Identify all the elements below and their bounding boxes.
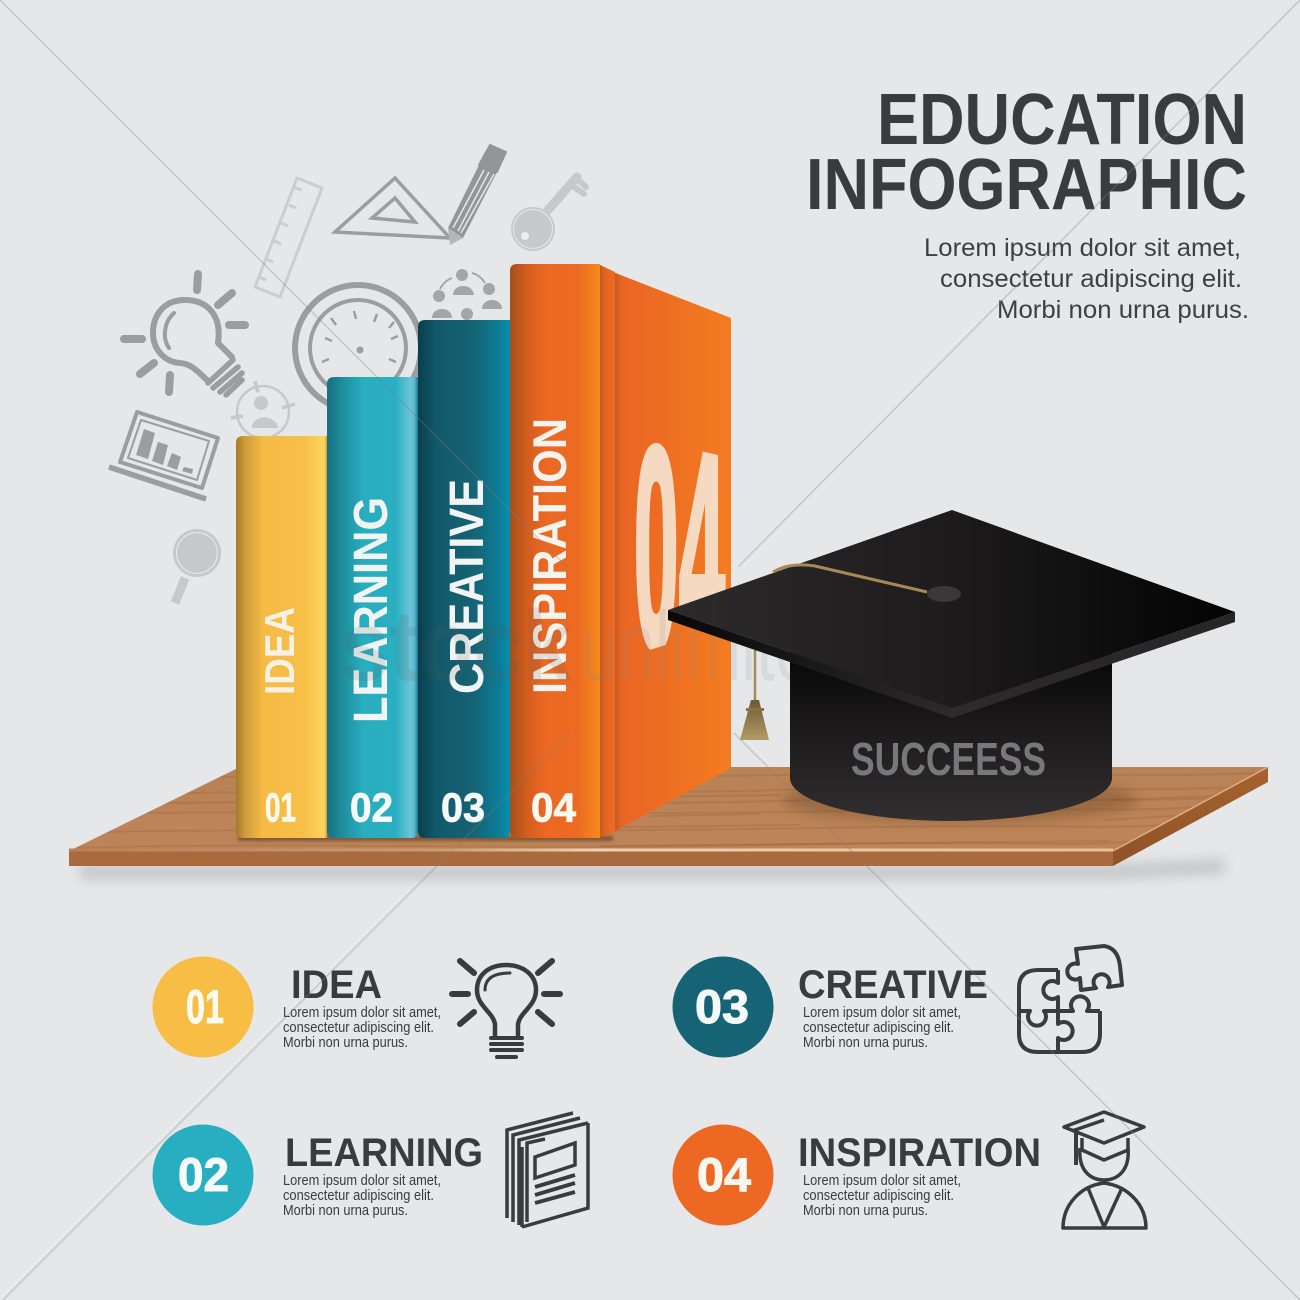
book 3: creative xyxy=(418,320,510,838)
icon: puzzle xyxy=(1019,946,1122,1052)
shelf front edge xyxy=(69,851,1113,866)
heading: LEARNING xyxy=(285,1131,483,1175)
spine title: LEARNING xyxy=(345,497,398,723)
description: consectetur adipiscing elit. xyxy=(803,1188,954,1204)
cover number: 4 xyxy=(679,390,725,708)
shelf right edge xyxy=(1113,767,1268,866)
badge number: 03 xyxy=(695,980,749,1033)
heading: IDEA xyxy=(291,963,382,1007)
heading: INSPIRATION xyxy=(798,1131,1041,1175)
icon: doodle pencil xyxy=(448,145,506,245)
description: Lorem ipsum dolor sit amet, xyxy=(283,1005,441,1021)
book shadow on shelf xyxy=(238,836,613,841)
badge number: 01 xyxy=(186,980,224,1033)
description: consectetur adipiscing elit. xyxy=(803,1020,954,1036)
item 01: idea xyxy=(152,956,560,1058)
icon: doodle target person xyxy=(231,381,295,438)
description xyxy=(283,1173,441,1219)
tassel xyxy=(740,640,769,740)
shelf top surface xyxy=(69,767,1268,851)
item 04: inspiration xyxy=(672,1112,1146,1228)
description xyxy=(803,1005,961,1051)
spine title: INSPIRATION xyxy=(523,418,576,694)
icon: book stack xyxy=(507,1113,588,1227)
cover number: 0 xyxy=(634,390,678,707)
watermark xyxy=(340,590,850,702)
spine number: 03 xyxy=(441,784,485,830)
cap shadow xyxy=(782,778,1138,822)
description xyxy=(283,1005,441,1051)
icon: doodle laptop chart xyxy=(109,412,218,499)
description: Morbi non urna purus. xyxy=(283,1203,408,1219)
description: Morbi non urna purus. xyxy=(803,1035,928,1051)
cap label: SUCCEESS xyxy=(851,733,1046,785)
shadow under shelf xyxy=(80,858,1225,880)
shelf xyxy=(60,767,1268,880)
cap base xyxy=(790,640,1112,821)
intro text: Morbi non urna purus. xyxy=(997,296,1249,324)
spine title: IDEA xyxy=(256,607,303,695)
item 03: creative xyxy=(672,946,1122,1058)
title: INFOGRAPHIC xyxy=(806,145,1247,225)
watermark: stock xyxy=(340,590,572,702)
description: Morbi non urna purus. xyxy=(283,1035,408,1051)
icon: doodle key xyxy=(511,177,586,251)
cap cord xyxy=(773,565,927,592)
number badge xyxy=(152,1124,254,1226)
spine number: 01 xyxy=(265,784,296,830)
intro text: Lorem ipsum dolor sit amet, xyxy=(924,234,1241,262)
number badge xyxy=(672,1124,774,1226)
book 1: idea xyxy=(236,436,327,838)
icon: doodle gauge xyxy=(295,285,421,411)
book 4: inspiration xyxy=(510,264,731,838)
icon: doodle magnifier xyxy=(173,529,221,603)
watermark: unlimited xyxy=(580,591,850,701)
number badge xyxy=(152,956,254,1058)
book cover xyxy=(613,272,731,832)
heading: CREATIVE xyxy=(798,963,988,1007)
icon: doodle people cycle xyxy=(432,269,502,320)
description xyxy=(803,1173,961,1219)
cap edge xyxy=(668,610,1235,718)
cover number xyxy=(636,443,726,650)
spine number: 02 xyxy=(350,784,393,830)
icon: doodle ruler xyxy=(255,178,322,297)
icon: doodle light bulb xyxy=(124,274,245,395)
spine number: 04 xyxy=(531,784,576,830)
book 2: learning xyxy=(327,377,418,838)
intro text: consectetur adipiscing elit. xyxy=(940,265,1242,293)
wood grain xyxy=(60,773,1262,848)
badge number: 04 xyxy=(697,1148,751,1201)
icon: light bulb xyxy=(452,961,560,1057)
spine xyxy=(510,264,600,838)
description: consectetur adipiscing elit. xyxy=(283,1020,434,1036)
description: Lorem ipsum dolor sit amet, xyxy=(803,1173,961,1189)
spine title: CREATIVE xyxy=(441,479,494,694)
icon: doodle set square xyxy=(335,178,450,238)
cap board xyxy=(668,510,1235,708)
cap button xyxy=(927,586,961,602)
description: Morbi non urna purus. xyxy=(803,1203,928,1219)
item 02: learning xyxy=(152,1113,588,1227)
graduation cap xyxy=(668,510,1235,822)
book hinge xyxy=(598,264,615,838)
intro text xyxy=(924,234,1249,324)
description: Lorem ipsum dolor sit amet, xyxy=(803,1005,961,1021)
badge number: 02 xyxy=(178,1148,229,1201)
description: consectetur adipiscing elit. xyxy=(283,1188,434,1204)
number badge xyxy=(672,956,774,1058)
title: EDUCATION xyxy=(877,80,1247,160)
icon: graduate xyxy=(1063,1112,1146,1228)
description: Lorem ipsum dolor sit amet, xyxy=(283,1173,441,1189)
title xyxy=(806,80,1247,225)
